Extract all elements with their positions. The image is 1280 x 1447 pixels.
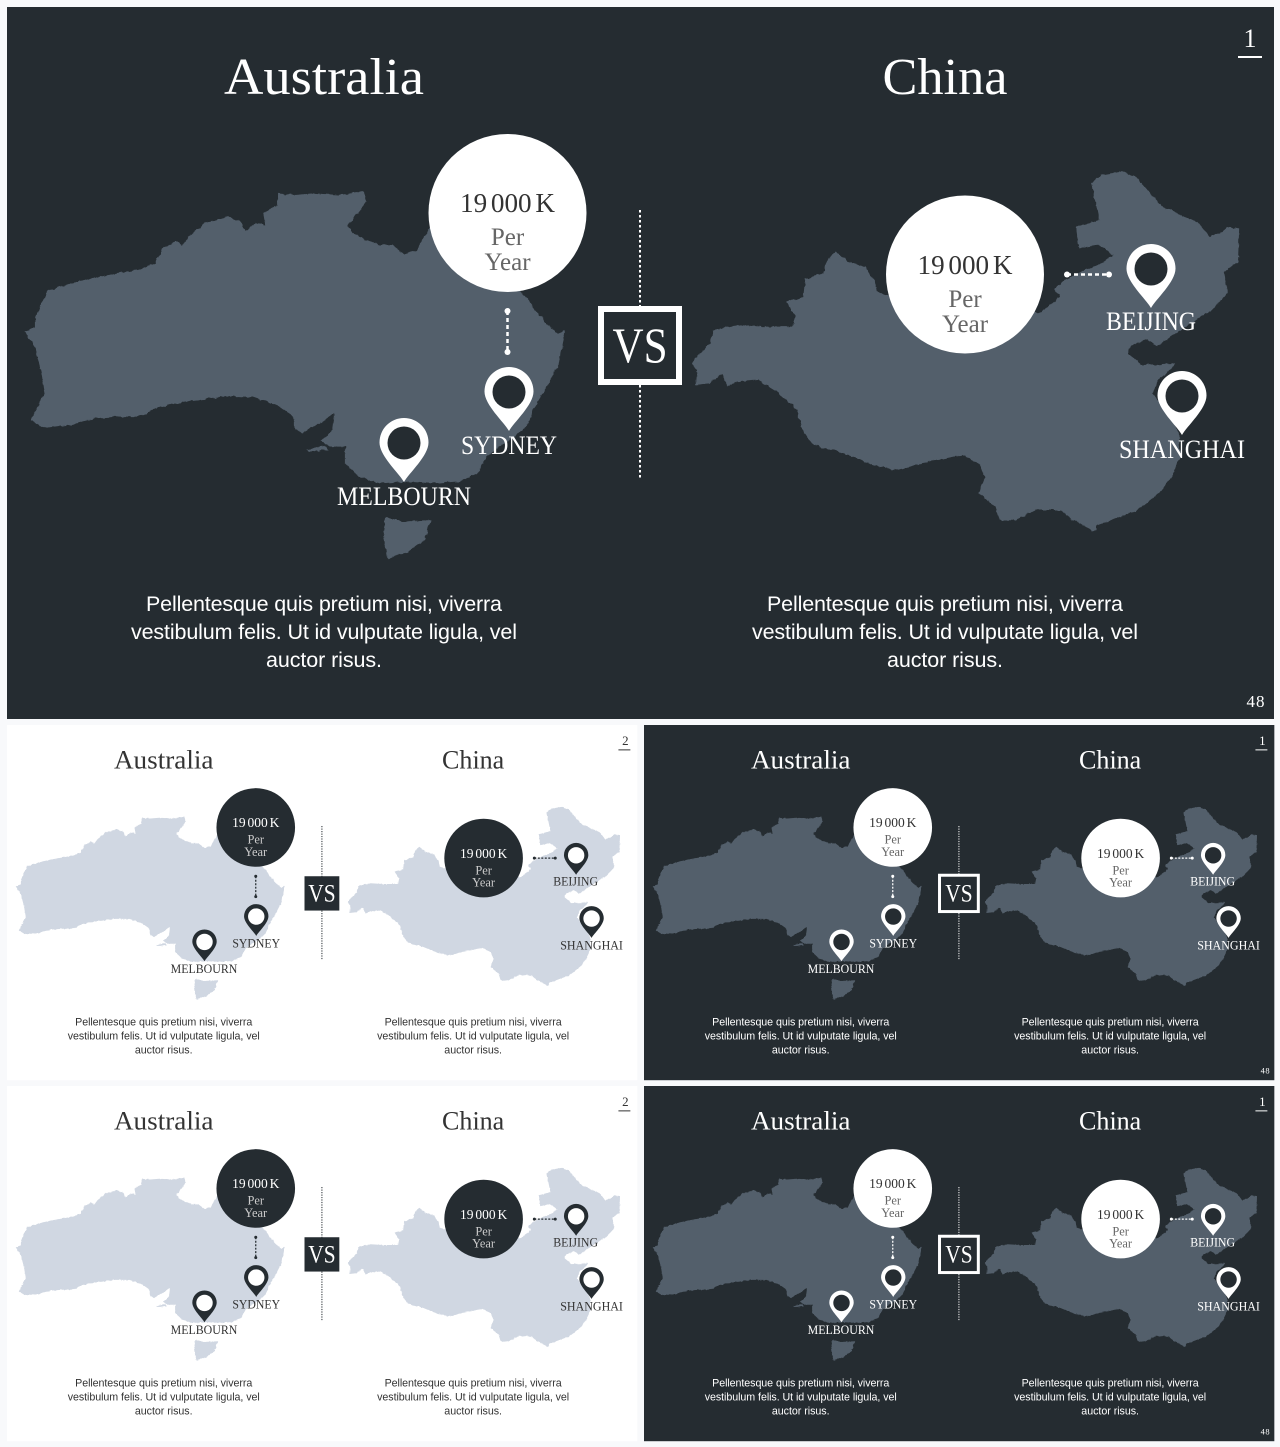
slide number: 1 bbox=[1259, 1094, 1266, 1109]
label: Sydney: SYDNEY bbox=[232, 935, 280, 950]
icon: Sydney pin bbox=[881, 1265, 905, 1297]
callout: China value: Year bbox=[472, 876, 496, 890]
callout: Australia value: Year bbox=[244, 845, 268, 859]
callout: China value: 19 000 K bbox=[460, 1207, 508, 1222]
panel: light slide, row two bbox=[7, 1086, 637, 1441]
callout: China value: Year bbox=[942, 311, 989, 338]
callout: China value: Year bbox=[1109, 876, 1133, 890]
heading: Australia: Australia bbox=[114, 1106, 214, 1135]
map: China bbox=[347, 1168, 620, 1347]
heading: Australia: Australia bbox=[114, 745, 214, 774]
icon: Sydney pin bbox=[244, 904, 268, 936]
callout: Australia value: Per bbox=[884, 1193, 902, 1207]
callout: Australia value bbox=[853, 788, 932, 867]
heading: Australia: Australia bbox=[224, 49, 424, 106]
slide background bbox=[644, 1086, 1274, 1441]
label: Beijing: BEIJING bbox=[1190, 1235, 1235, 1250]
panel: large dark slide bbox=[7, 7, 1274, 719]
divider with VS badge: VS bbox=[308, 881, 336, 908]
text block: China description bbox=[377, 1016, 569, 1056]
map: Australia bbox=[16, 1178, 285, 1360]
callout: China value: 19 000 K bbox=[1097, 846, 1145, 861]
text block: Australia description bbox=[705, 1377, 897, 1417]
label: Melbourn: MELBOURN bbox=[171, 1322, 238, 1337]
icon: Beijing pin bbox=[1126, 244, 1176, 308]
map: Australia bbox=[653, 1178, 922, 1360]
callout: China value bbox=[444, 819, 523, 897]
divider with VS badge bbox=[305, 1187, 339, 1321]
label: Shanghai: SHANGHAI bbox=[560, 937, 623, 952]
callout: China value: 19 000 K bbox=[918, 250, 1013, 280]
callout: Australia value: 19 000 K bbox=[869, 815, 917, 830]
text block: Australia description: auctor risus. bbox=[135, 1405, 193, 1417]
page number: 48 bbox=[1246, 692, 1266, 711]
page number: 48 bbox=[1261, 1426, 1270, 1436]
heading: China: China bbox=[442, 1106, 505, 1135]
label: Beijing: BEIJING bbox=[1106, 307, 1196, 336]
label: Melbourn: MELBOURN bbox=[171, 961, 238, 976]
text block: China description bbox=[1014, 1016, 1206, 1056]
callout: Australia value: Year bbox=[484, 249, 531, 276]
slide number bbox=[1238, 24, 1262, 58]
text block: China description: vestibulum felis. Ut id vulputate ligula, vel bbox=[377, 1391, 569, 1403]
label: Sydney: SYDNEY bbox=[869, 935, 917, 950]
icon: Melbourn pin bbox=[380, 418, 428, 482]
map: Australia bbox=[24, 192, 565, 558]
text block: China description: Pellentesque quis pretium nisi, viverra bbox=[1022, 1377, 1199, 1389]
callout: Australia value: Per bbox=[884, 832, 902, 846]
slide number bbox=[1255, 733, 1267, 750]
text block: China description bbox=[752, 592, 1138, 672]
slide background bbox=[644, 725, 1274, 1080]
text block: China description: vestibulum felis. Ut id vulputate ligula, vel bbox=[1014, 1030, 1206, 1042]
icon: Melbourn pin bbox=[192, 929, 217, 961]
slide number: 1 bbox=[1259, 733, 1266, 748]
callout: China value: 19 000 K bbox=[1097, 1207, 1145, 1222]
text block: Australia description: Pellentesque quis pretium nisi, viverra bbox=[75, 1016, 252, 1028]
text block: Australia description bbox=[68, 1377, 260, 1417]
divider with VS badge bbox=[940, 1187, 978, 1321]
icon: Beijing pin bbox=[564, 1204, 588, 1236]
callout: China value: 19 000 K bbox=[460, 846, 508, 861]
text block: Australia description: auctor risus. bbox=[135, 1044, 193, 1056]
label: Melbourn: MELBOURN bbox=[808, 1322, 875, 1337]
label: Beijing: BEIJING bbox=[1190, 874, 1235, 889]
icon: Shanghai pin bbox=[579, 906, 604, 938]
heading: Australia: Australia bbox=[751, 1106, 851, 1135]
text block: China description: Pellentesque quis pretium nisi, viverra bbox=[1022, 1016, 1199, 1028]
connector: Beijing bbox=[533, 857, 557, 860]
heading: China: China bbox=[1079, 745, 1142, 774]
slide number: 2 bbox=[622, 733, 629, 748]
connector: Beijing bbox=[1064, 272, 1112, 278]
map: China bbox=[984, 807, 1257, 986]
text block: Australia description bbox=[705, 1016, 897, 1056]
icon: Beijing pin bbox=[564, 843, 588, 875]
text block: Australia description: vestibulum felis. Ut id vulputate ligula, vel bbox=[131, 620, 517, 644]
text block: China description bbox=[377, 1377, 569, 1417]
heading: China: China bbox=[442, 745, 505, 774]
callout: Australia value: Year bbox=[881, 1206, 905, 1220]
callout: Australia value: Per bbox=[247, 832, 265, 846]
text block: Australia description: vestibulum felis. Ut id vulputate ligula, vel bbox=[705, 1030, 897, 1042]
icon: Sydney pin bbox=[244, 1265, 268, 1297]
text block: Australia description bbox=[68, 1016, 260, 1056]
heading: China: China bbox=[882, 49, 1008, 106]
text block: China description: Pellentesque quis pretium nisi, viverra bbox=[385, 1016, 562, 1028]
label: Sydney: SYDNEY bbox=[232, 1296, 280, 1311]
callout: China value: Year bbox=[472, 1237, 496, 1251]
connector: Beijing bbox=[1170, 1218, 1194, 1221]
callout: China value: Year bbox=[1109, 1237, 1133, 1251]
callout: Australia value: 19 000 K bbox=[232, 815, 280, 830]
callout: China value bbox=[444, 1180, 523, 1258]
divider with VS badge bbox=[940, 826, 978, 960]
callout: Australia value: Year bbox=[244, 1206, 268, 1220]
callout: China value: Per bbox=[948, 286, 982, 313]
text block: Australia description: Pellentesque quis pretium nisi, viverra bbox=[712, 1016, 889, 1028]
panel: light slide, row one bbox=[7, 725, 637, 1080]
icon: Sydney pin bbox=[484, 367, 534, 431]
icon: Beijing pin bbox=[1201, 1204, 1225, 1236]
label: Sydney: SYDNEY bbox=[869, 1296, 917, 1311]
slide number: 2 bbox=[622, 1094, 629, 1109]
callout: China value: Per bbox=[475, 863, 493, 877]
text block: Australia description: vestibulum felis. Ut id vulputate ligula, vel bbox=[68, 1030, 260, 1042]
callout: Australia value bbox=[216, 1149, 295, 1228]
slide number bbox=[618, 733, 630, 750]
callout: Australia value: Per bbox=[491, 224, 525, 251]
divider with VS badge: VS bbox=[945, 881, 973, 908]
map: Australia bbox=[16, 817, 285, 999]
text block: China description: auctor risus. bbox=[444, 1044, 502, 1056]
slide background bbox=[7, 1086, 637, 1441]
label: Shanghai: SHANGHAI bbox=[1119, 435, 1245, 464]
callout: Australia value bbox=[428, 134, 586, 292]
icon: Melbourn pin bbox=[829, 1290, 854, 1322]
text block: Australia description: Pellentesque quis pretium nisi, viverra bbox=[146, 592, 502, 616]
callout: Australia value: 19 000 K bbox=[869, 1176, 917, 1191]
slide background bbox=[7, 7, 1274, 719]
slide background bbox=[7, 725, 637, 1080]
map: Australia bbox=[653, 817, 922, 999]
text block: Australia description: Pellentesque quis pretium nisi, viverra bbox=[75, 1377, 252, 1389]
callout: China value bbox=[1081, 819, 1160, 897]
text block: China description: vestibulum felis. Ut id vulputate ligula, vel bbox=[752, 620, 1138, 644]
text block: China description: auctor risus. bbox=[887, 648, 1003, 672]
callout: Australia value: 19 000 K bbox=[460, 188, 556, 218]
callout: Australia value: Per bbox=[247, 1193, 265, 1207]
divider with VS badge bbox=[305, 826, 339, 960]
map: China bbox=[347, 807, 620, 986]
label: Beijing: BEIJING bbox=[553, 874, 598, 889]
text block: China description: auctor risus. bbox=[1081, 1405, 1139, 1417]
icon: Sydney pin bbox=[881, 904, 905, 936]
icon: Beijing pin bbox=[1201, 843, 1225, 875]
text block: China description bbox=[1014, 1377, 1206, 1417]
callout: Australia value: Year bbox=[881, 845, 905, 859]
text block: Australia description: auctor risus. bbox=[266, 648, 382, 672]
callout: China value bbox=[1081, 1180, 1160, 1258]
text block: China description: vestibulum felis. Ut id vulputate ligula, vel bbox=[377, 1030, 569, 1042]
callout: Australia value bbox=[216, 788, 295, 867]
page number: 48 bbox=[1261, 1065, 1270, 1075]
text block: China description: vestibulum felis. Ut id vulputate ligula, vel bbox=[1014, 1391, 1206, 1403]
text block: China description: Pellentesque quis pretium nisi, viverra bbox=[385, 1377, 562, 1389]
text block: Australia description: Pellentesque quis pretium nisi, viverra bbox=[712, 1377, 889, 1389]
label: Shanghai: SHANGHAI bbox=[1197, 937, 1260, 952]
label: Melbourn: MELBOURN bbox=[337, 482, 471, 511]
icon: Shanghai pin bbox=[1216, 1267, 1241, 1299]
text block: Australia description: auctor risus. bbox=[772, 1044, 830, 1056]
map: China bbox=[984, 1168, 1257, 1347]
text block: Australia description: vestibulum felis. Ut id vulputate ligula, vel bbox=[68, 1391, 260, 1403]
callout: China value: Per bbox=[1112, 1224, 1130, 1238]
map: China bbox=[691, 172, 1239, 532]
icon: Melbourn pin bbox=[192, 1290, 217, 1322]
text block: China description: Pellentesque quis pretium nisi, viverra bbox=[767, 592, 1123, 616]
label: Sydney: SYDNEY bbox=[461, 431, 557, 460]
label: Melbourn: MELBOURN bbox=[808, 961, 875, 976]
text block: China description: auctor risus. bbox=[444, 1405, 502, 1417]
icon: Shanghai pin bbox=[579, 1267, 604, 1299]
divider with VS badge bbox=[601, 210, 679, 480]
label: Shanghai: SHANGHAI bbox=[1197, 1298, 1260, 1313]
connector: Sydney bbox=[891, 875, 894, 898]
connector: Sydney bbox=[254, 1236, 257, 1259]
connector: Sydney bbox=[504, 308, 510, 355]
connector: Beijing bbox=[1170, 857, 1194, 860]
text block: Australia description bbox=[131, 592, 517, 672]
panel: dark slide, row two bbox=[644, 1086, 1274, 1441]
icon: Shanghai pin bbox=[1158, 371, 1206, 435]
icon: Melbourn pin bbox=[829, 929, 854, 961]
label: Shanghai: SHANGHAI bbox=[560, 1298, 623, 1313]
callout: China value: Per bbox=[1112, 863, 1130, 877]
slide number bbox=[1255, 1094, 1267, 1111]
divider with VS badge: VS bbox=[308, 1242, 336, 1269]
text block: Australia description: vestibulum felis. Ut id vulputate ligula, vel bbox=[705, 1391, 897, 1403]
callout: China value bbox=[886, 196, 1044, 354]
slide number: 1 bbox=[1244, 24, 1256, 53]
slide number bbox=[618, 1094, 630, 1111]
connector: Sydney bbox=[891, 1236, 894, 1259]
callout: Australia value bbox=[853, 1149, 932, 1228]
text block: Australia description: auctor risus. bbox=[772, 1405, 830, 1417]
text block: China description: auctor risus. bbox=[1081, 1044, 1139, 1056]
heading: China: China bbox=[1079, 1106, 1142, 1135]
icon: Shanghai pin bbox=[1216, 906, 1241, 938]
panel: dark slide, row one bbox=[644, 725, 1274, 1080]
callout: China value: Per bbox=[475, 1224, 493, 1238]
divider with VS badge: VS bbox=[945, 1242, 973, 1269]
callout: Australia value: 19 000 K bbox=[232, 1176, 280, 1191]
label: Beijing: BEIJING bbox=[553, 1235, 598, 1250]
connector: Beijing bbox=[533, 1218, 557, 1221]
connector: Sydney bbox=[254, 875, 257, 898]
divider with VS badge: VS bbox=[612, 317, 668, 373]
heading: Australia: Australia bbox=[751, 745, 851, 774]
